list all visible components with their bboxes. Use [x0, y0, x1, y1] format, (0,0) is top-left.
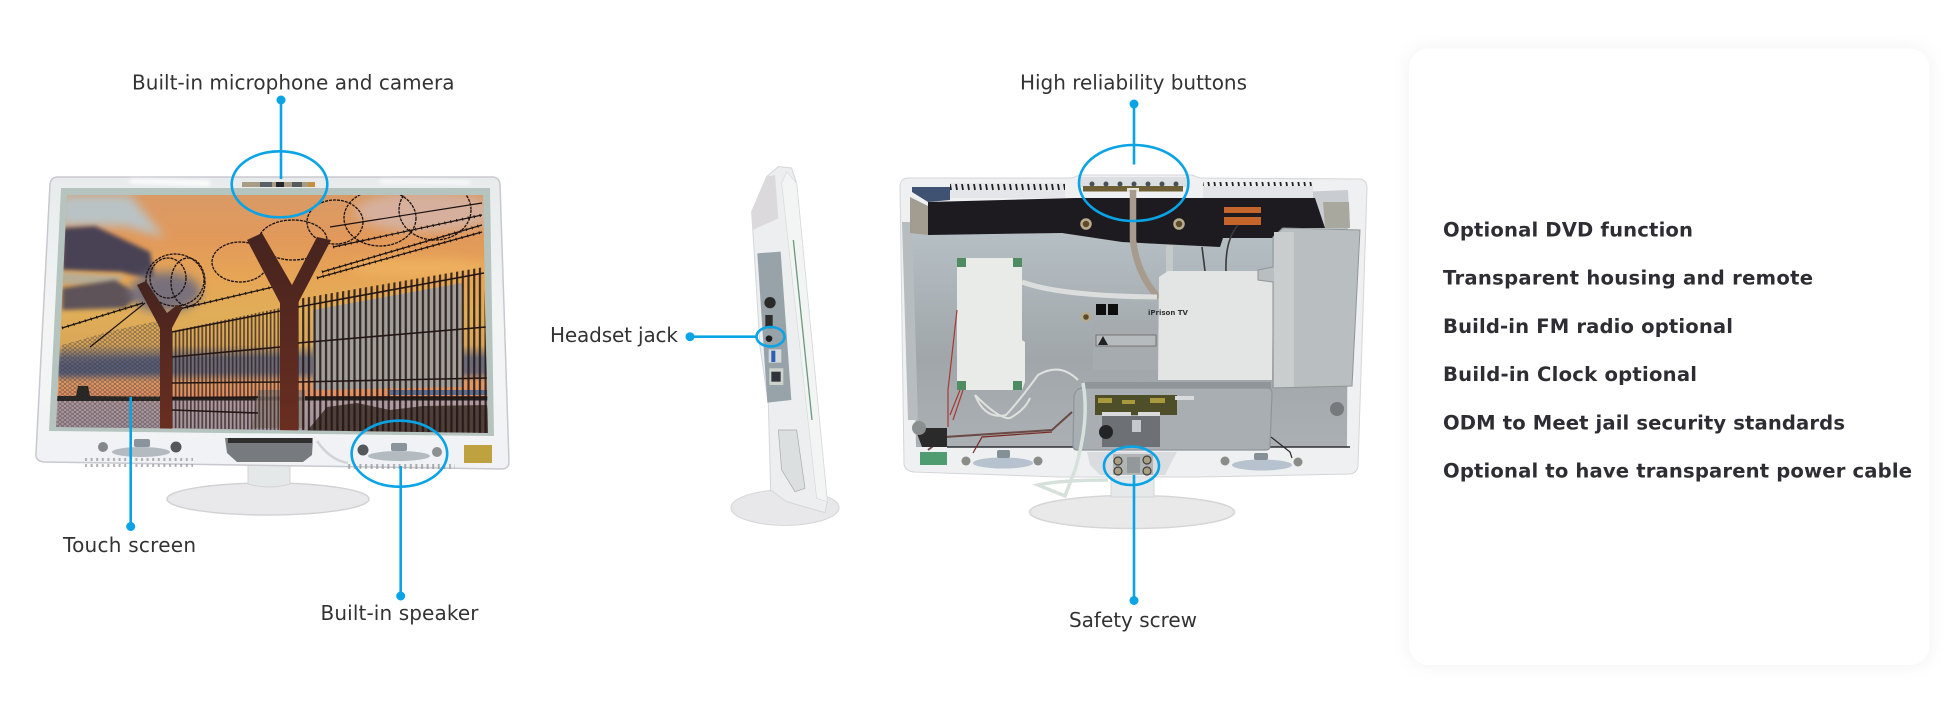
pointer: buttons — [1133, 104, 1135, 164]
metal bracket — [1258, 228, 1360, 388]
reeds — [307, 403, 490, 433]
side housing — [752, 167, 827, 513]
transparent housing — [36, 177, 509, 469]
sign panel — [313, 283, 462, 390]
sticker warning row — [1096, 335, 1156, 346]
green board line — [793, 240, 812, 420]
barbed wire — [62, 180, 482, 347]
feature: ODM: ODM to Meet jail security standards — [1443, 411, 1845, 434]
pointer dot: microphone — [276, 96, 286, 104]
inner bezel — [49, 188, 494, 436]
left fence bars — [172, 308, 280, 430]
pointer: speaker — [399, 466, 402, 596]
cable — [317, 441, 348, 463]
screen image — [50, 180, 495, 435]
highlight ring: buttons — [1079, 145, 1188, 221]
callout: buttons — [1020, 70, 1247, 221]
pale cloud — [60, 272, 125, 286]
mounts — [1082, 220, 1184, 321]
label: microphone and camera: Built-in microphone and camera — [132, 70, 454, 94]
left module — [957, 258, 1025, 390]
label: speaker: Built-in speaker — [320, 601, 479, 625]
safety screw plate — [1087, 452, 1177, 475]
lighthouse and shore — [56, 386, 170, 401]
pale sky at top left — [60, 195, 165, 238]
panel card — [1409, 48, 1930, 665]
sticker black squares — [1096, 304, 1118, 315]
housing highlight — [130, 179, 470, 186]
main board — [1095, 395, 1177, 415]
speaker grille left — [83, 458, 193, 467]
blue shore right — [390, 390, 488, 395]
bottom acrylic cover — [1073, 388, 1272, 450]
speaker right — [358, 443, 442, 461]
back view of TV — [900, 175, 1367, 528]
feature: DVD: Optional DVD function — [1443, 218, 1693, 242]
warning icon — [1098, 336, 1108, 345]
highlight ring: speaker — [352, 421, 447, 487]
hdmi port — [765, 315, 773, 328]
left Y post — [137, 281, 183, 430]
stand base — [167, 483, 369, 515]
port plate — [757, 252, 791, 403]
headset port — [766, 335, 772, 342]
bracket top bar — [228, 438, 312, 443]
rating sticker — [1093, 320, 1158, 370]
left frame strip — [902, 222, 918, 420]
label: touch screen: Touch screen — [62, 533, 196, 557]
fence rails — [172, 273, 488, 413]
board flecks — [1098, 398, 1165, 404]
pink sky at top right — [355, 192, 495, 232]
dark top band — [928, 198, 1325, 247]
chain link fence — [56, 321, 160, 428]
power cable — [1038, 383, 1108, 496]
callout: safety screw — [1069, 447, 1197, 632]
pointer: safety screw — [1133, 475, 1135, 600]
board connectors — [1102, 396, 1194, 416]
control board — [464, 445, 492, 463]
right knob — [1330, 402, 1344, 416]
panel lower edge — [947, 446, 1350, 448]
capacitor — [1099, 425, 1113, 439]
tan corner left — [910, 197, 928, 235]
vehicle — [252, 390, 305, 428]
flat cable highlight — [1132, 420, 1141, 432]
panel: optional features — [1409, 48, 1930, 665]
side stand base — [731, 490, 839, 525]
antenna wires — [1202, 225, 1238, 271]
label: buttons: High reliability buttons — [1020, 70, 1247, 94]
black corner block — [915, 428, 947, 447]
highlight ring: safety screw — [1104, 447, 1159, 485]
highlight ring: microphone — [232, 151, 327, 217]
camera strip — [242, 182, 315, 187]
stand neck — [248, 460, 290, 487]
feature: clock: Build-in Clock optional — [1443, 363, 1697, 386]
ribbon cable — [1133, 190, 1159, 298]
callout: speaker — [320, 421, 479, 625]
back speaker right — [1220, 453, 1302, 470]
purple cloud near left post — [129, 272, 201, 312]
label: safety screw: Safety screw — [1069, 608, 1197, 632]
antenna — [1224, 207, 1261, 225]
feature list — [1443, 218, 1912, 482]
top vent left — [950, 183, 1065, 198]
right module — [1158, 271, 1273, 380]
top glossy navy — [912, 187, 950, 202]
highlight ring: headset jack — [756, 327, 784, 346]
corner knob — [912, 421, 926, 435]
internal hardware — [778, 430, 805, 492]
center bracket — [225, 438, 313, 462]
back housing — [900, 175, 1367, 477]
back stand base — [1030, 496, 1234, 528]
pointer dot: headset jack — [686, 332, 694, 341]
metal panel — [912, 228, 1348, 447]
tan corner right — [1323, 202, 1350, 228]
feature: housing: Transparent housing and remote — [1443, 267, 1813, 290]
callout: headset jack — [550, 323, 784, 347]
right wire — [1271, 437, 1292, 458]
rear vent area — [752, 175, 778, 230]
feature: FM radio: Build-in FM radio optional — [1443, 315, 1733, 338]
right fence bars — [298, 267, 488, 433]
back speaker left — [962, 450, 1042, 468]
white cable — [1022, 282, 1157, 297]
callout: microphone and camera — [132, 70, 454, 217]
red wires — [948, 310, 963, 427]
red and black wire — [973, 432, 1052, 453]
front view of TV — [36, 177, 509, 515]
power board — [920, 452, 947, 465]
pointer: headset jack — [690, 335, 757, 338]
signal wire bundle — [928, 412, 1072, 450]
standoff — [1166, 245, 1173, 272]
usb port — [769, 349, 781, 363]
module corners — [957, 258, 1022, 390]
side view of TV — [731, 167, 839, 525]
dark cloud — [62, 226, 155, 280]
pointer dot: touch screen — [126, 522, 135, 531]
brand label: iPrison TV — [1148, 309, 1189, 317]
pointer: touch screen — [129, 397, 132, 526]
orange band right — [359, 259, 482, 275]
top right glossy area — [1200, 190, 1350, 228]
cover top bar — [1085, 382, 1271, 388]
bracket column — [1274, 232, 1294, 387]
pointer dot: speaker — [396, 592, 405, 600]
speaker left — [98, 439, 182, 457]
blue horizon band — [56, 358, 170, 376]
feature: power cable: Optional to have transparent power cable — [1443, 460, 1912, 482]
front edge — [782, 172, 827, 502]
low cloud — [62, 280, 140, 310]
label: headset jack: Headset jack — [550, 323, 678, 347]
pointer dot: buttons — [1130, 100, 1138, 108]
back stand neck — [1111, 470, 1154, 497]
sky — [50, 190, 495, 435]
right Y post — [247, 233, 331, 432]
pointer dot: safety screw — [1130, 596, 1138, 605]
infographic canvas — [35, 74, 1912, 632]
lan port — [769, 368, 783, 385]
flat cable — [1102, 416, 1160, 447]
button board — [1078, 177, 1188, 192]
power port — [764, 297, 776, 308]
clear tube — [975, 370, 1078, 418]
callout: touch screen — [62, 397, 196, 557]
top vent right — [1203, 182, 1313, 198]
speaker grille right — [345, 463, 455, 471]
pointer: microphone — [280, 100, 282, 179]
